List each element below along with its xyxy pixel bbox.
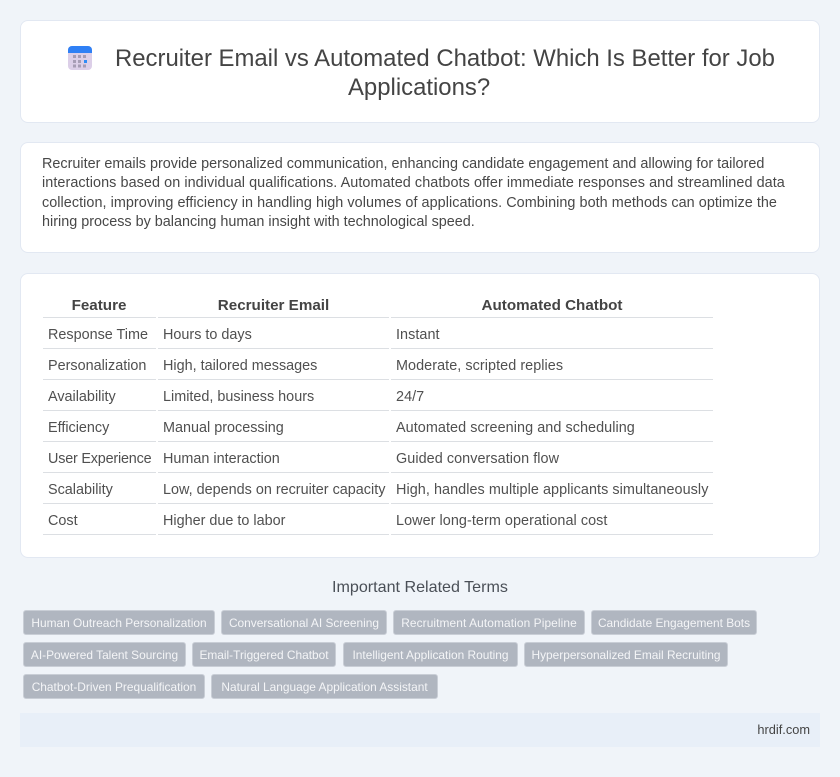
- table header: Recruiter Email: Recruiter Email: [218, 297, 329, 314]
- title: Recruiter Email vs Automated Chatbot: Which Is Better for Job: [115, 45, 775, 72]
- comparison table: Higher due to labor: [163, 513, 285, 529]
- summary text: [42, 156, 785, 230]
- tag: Conversational AI Screening: [229, 616, 379, 630]
- tag: [192, 642, 336, 667]
- tag: [23, 610, 215, 635]
- comparison table: Response Time: [48, 327, 148, 343]
- related term tags: [23, 610, 757, 699]
- comparison table: Lower long-term operational cost: [396, 513, 608, 529]
- title: Applications?: [348, 74, 490, 101]
- footer bar: [20, 713, 820, 747]
- tag: [524, 642, 728, 667]
- comparison table: Low, depends on recruiter capacity: [163, 482, 385, 498]
- panel: comparison table card: [20, 273, 820, 558]
- comparison table: Limited, business hours: [163, 389, 314, 405]
- comparison table: Automated screening and scheduling: [396, 420, 635, 436]
- summary text: hiring process by balancing human insight with technological speed.: [42, 214, 475, 230]
- summary text: interactions based on individual qualifications. Automated chatbots offer immediate responses and streamlined data: [42, 175, 785, 191]
- tag: AI-Powered Talent Sourcing: [31, 648, 178, 662]
- tag: [591, 610, 757, 635]
- footer source: hrdif.com: [757, 722, 810, 737]
- comparison table: Manual processing: [163, 420, 284, 436]
- comparison table: Cost: [48, 513, 78, 529]
- comparison table: Personalization: [48, 358, 146, 374]
- title: [115, 45, 775, 101]
- comparison table: User Experience: [48, 451, 151, 467]
- comparison table: Hours to days: [163, 327, 252, 343]
- comparison table: Guided conversation flow: [396, 451, 559, 467]
- tag: Email-Triggered Chatbot: [199, 648, 329, 662]
- summary text: collection, improving efficiency in handling high volumes of applications. Combining both methods can optimize the: [42, 195, 777, 211]
- tag: Candidate Engagement Bots: [598, 616, 750, 630]
- tag: [23, 674, 205, 699]
- comparison table: Scalability: [48, 482, 113, 498]
- table header: Feature: Feature: [72, 297, 126, 314]
- comparison table: 24/7: [396, 389, 424, 405]
- tag: [23, 642, 186, 667]
- tag: Natural Language Application Assistant: [221, 680, 428, 694]
- tag: Intelligent Application Routing: [352, 648, 508, 662]
- tag: [393, 610, 585, 635]
- comparison table: Human interaction: [163, 451, 280, 467]
- tag: Recruitment Automation Pipeline: [401, 616, 577, 630]
- tag: Hyperpersonalized Email Recruiting: [531, 648, 720, 662]
- comparison table: [43, 297, 713, 535]
- comparison table: Efficiency: [48, 420, 109, 436]
- comparison table: Instant: [396, 327, 440, 343]
- panel: summary card: [20, 142, 820, 253]
- tag: Human Outreach Personalization: [31, 616, 207, 630]
- tag: [343, 642, 518, 667]
- comparison table: High, tailored messages: [163, 358, 317, 374]
- tag: [211, 674, 438, 699]
- icon: calendar: [68, 46, 92, 70]
- comparison table: Moderate, scripted replies: [396, 358, 563, 374]
- comparison table: Availability: [48, 389, 116, 405]
- tag: Chatbot-Driven Prequalification: [32, 680, 196, 694]
- panel: header card: [20, 20, 820, 123]
- comparison table: High, handles multiple applicants simultaneously: [396, 482, 708, 498]
- summary text: Recruiter emails provide personalized communication, enhancing candidate engagement and allowing for tailored: [42, 156, 764, 172]
- related terms heading: Important Related Terms: [332, 578, 508, 596]
- table header: Automated Chatbot: Automated Chatbot: [482, 297, 622, 314]
- tag: [221, 610, 387, 635]
